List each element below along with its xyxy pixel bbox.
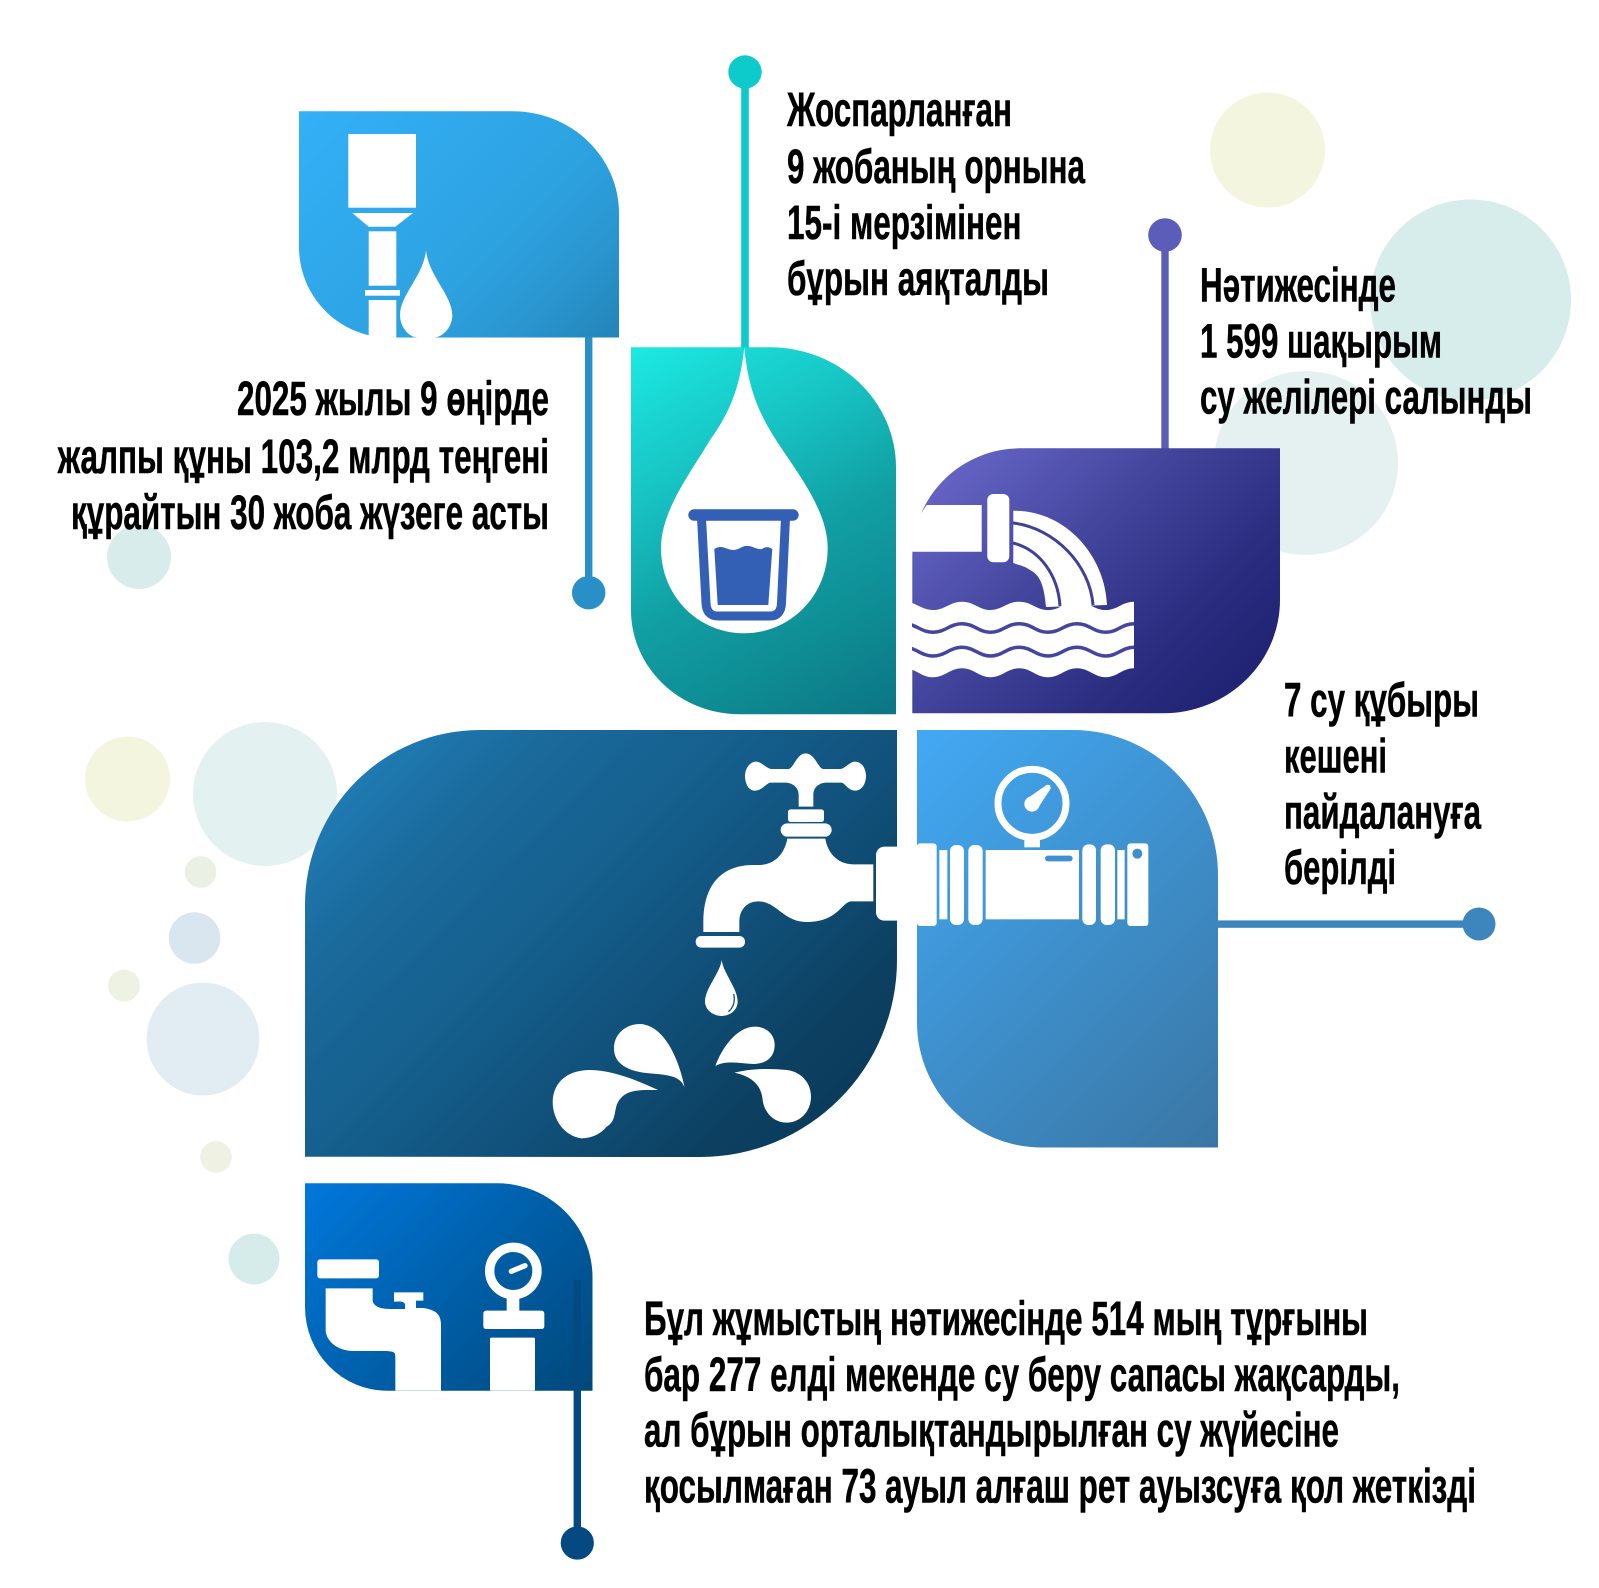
panel shape — [917, 730, 1218, 1148]
icon: pipe with drop — [348, 134, 452, 338]
text block: ahead of schedule: бұрын аяқталды — [787, 253, 1049, 306]
connector: teal panel to dot — [728, 55, 762, 349]
text block: 30 projects: жалпы құны 103,2 млрд теңгені — [57, 431, 549, 484]
icon: falling drop — [705, 960, 738, 1016]
panel shape — [305, 730, 897, 1157]
text block: water lines built: 1 599 шақырым — [1200, 315, 1442, 368]
text block: pipeline complexes: берілді — [1284, 842, 1396, 895]
text block: pipeline complexes: пайдалануға — [1284, 786, 1481, 839]
text block: ahead of schedule — [786, 84, 1085, 306]
icon: pipe and pressure gauge — [917, 769, 1148, 926]
connector: purple panel to dot — [1148, 218, 1182, 450]
connector: bottom panel to dot — [561, 1280, 594, 1560]
icon: gauge on pipe — [483, 1247, 544, 1391]
panel shape — [305, 1183, 592, 1391]
icon: faucet — [696, 753, 906, 948]
panel: pipe with gauge — [917, 730, 1218, 1148]
panel: settlement water supply — [305, 1183, 592, 1391]
text block: 30 projects: 2025 жылы 9 өңірде — [237, 373, 549, 426]
connector: top-left panel to dot — [572, 330, 605, 609]
text block: ahead of schedule: Жоспарланған — [786, 84, 1012, 137]
panel: faucet — [305, 730, 906, 1157]
background bubbles — [85, 92, 1571, 1284]
panel shape — [631, 347, 896, 714]
icon: tap on pipe — [317, 1259, 441, 1391]
panel shape — [912, 448, 1280, 713]
text block: ahead of schedule: 9 жобаның орнына — [787, 141, 1085, 194]
icon: large drop — [661, 347, 828, 633]
panel: water tower — [299, 111, 619, 338]
text block: 30 projects — [57, 373, 549, 540]
panel: wastewater outlet — [904, 448, 1280, 713]
panel: drinking water — [631, 347, 896, 714]
text block: pipeline complexes — [1284, 674, 1481, 895]
text block: water lines built — [1200, 260, 1532, 424]
panel shape — [299, 111, 619, 338]
text block: pipeline complexes: 7 су құбыры — [1284, 674, 1479, 728]
text block: 30 projects: құрайтын 30 жоба жүзеге асты — [71, 487, 549, 540]
icon: glass of water — [688, 509, 799, 616]
connector: pipe panel to dot — [1215, 908, 1496, 940]
text block: pipeline complexes: кешені — [1284, 730, 1387, 784]
text block: results — [644, 1293, 1476, 1514]
text block: ahead of schedule: 15-і мерзімінен — [787, 197, 1022, 250]
text block: water lines built: Нәтижесінде — [1200, 260, 1396, 313]
icon: water waves — [904, 602, 1134, 677]
icon: water splashes — [553, 1024, 811, 1138]
icon: outlet pipe — [912, 494, 1107, 607]
